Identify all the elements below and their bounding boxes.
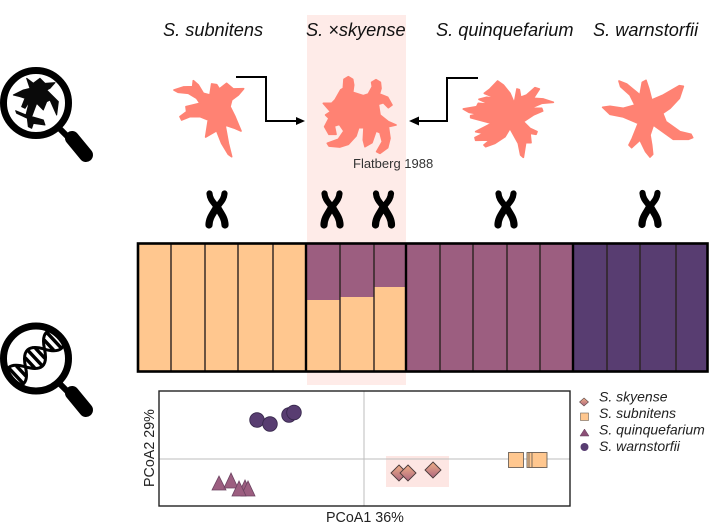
arrow: subnitens to hybrid bbox=[236, 77, 305, 125]
icon: chromosome subnitens bbox=[209, 194, 225, 225]
icon: chromosome quinquefarium bbox=[498, 194, 514, 225]
plant: S. quinquefarium bbox=[463, 81, 553, 157]
title: S. warnstorfii: S. warnstorfii bbox=[593, 20, 699, 40]
plant: S. warnstorfii bbox=[603, 80, 693, 157]
citation: Flatberg 1988: Flatberg 1988 bbox=[353, 156, 433, 171]
points: S. skyense bbox=[391, 462, 441, 481]
points: S. subnitens bbox=[508, 452, 547, 468]
legend bbox=[580, 388, 705, 454]
title: S. quinquefarium: S. quinquefarium bbox=[436, 20, 574, 40]
plant: S. xskyense bbox=[323, 77, 396, 153]
species titles bbox=[163, 20, 699, 40]
points: S. quinquefarium bbox=[212, 473, 255, 496]
legend: S. skyense bbox=[599, 388, 668, 404]
points: S. warnstorfii bbox=[250, 405, 301, 431]
title: S. subnitens: S. subnitens bbox=[163, 20, 263, 40]
scatter plot: PCoA bbox=[159, 391, 570, 506]
bar chart: genetic ancestry bbox=[137, 243, 708, 372]
pink highlight band: hybrid column bbox=[307, 15, 406, 385]
legend: S. warnstorfii bbox=[599, 438, 681, 454]
icon: magnifier over DNA bbox=[0, 323, 86, 410]
icon: magnifier over moss bbox=[4, 70, 86, 155]
arrow: quinquefarium to hybrid bbox=[409, 78, 478, 126]
legend: S. subnitens bbox=[599, 405, 676, 421]
icon: chromosome hybrid 1 bbox=[324, 194, 340, 225]
legend: S. quinquefarium bbox=[599, 422, 705, 438]
icon: chromosome warnstorfii bbox=[642, 193, 658, 224]
axis label: PCoA2: PCoA2 29% bbox=[142, 409, 158, 487]
title: S. ×skyense: S. ×skyense bbox=[306, 20, 406, 40]
plant: S. subnitens bbox=[174, 81, 244, 157]
icon: chromosome hybrid 2 bbox=[376, 194, 392, 225]
